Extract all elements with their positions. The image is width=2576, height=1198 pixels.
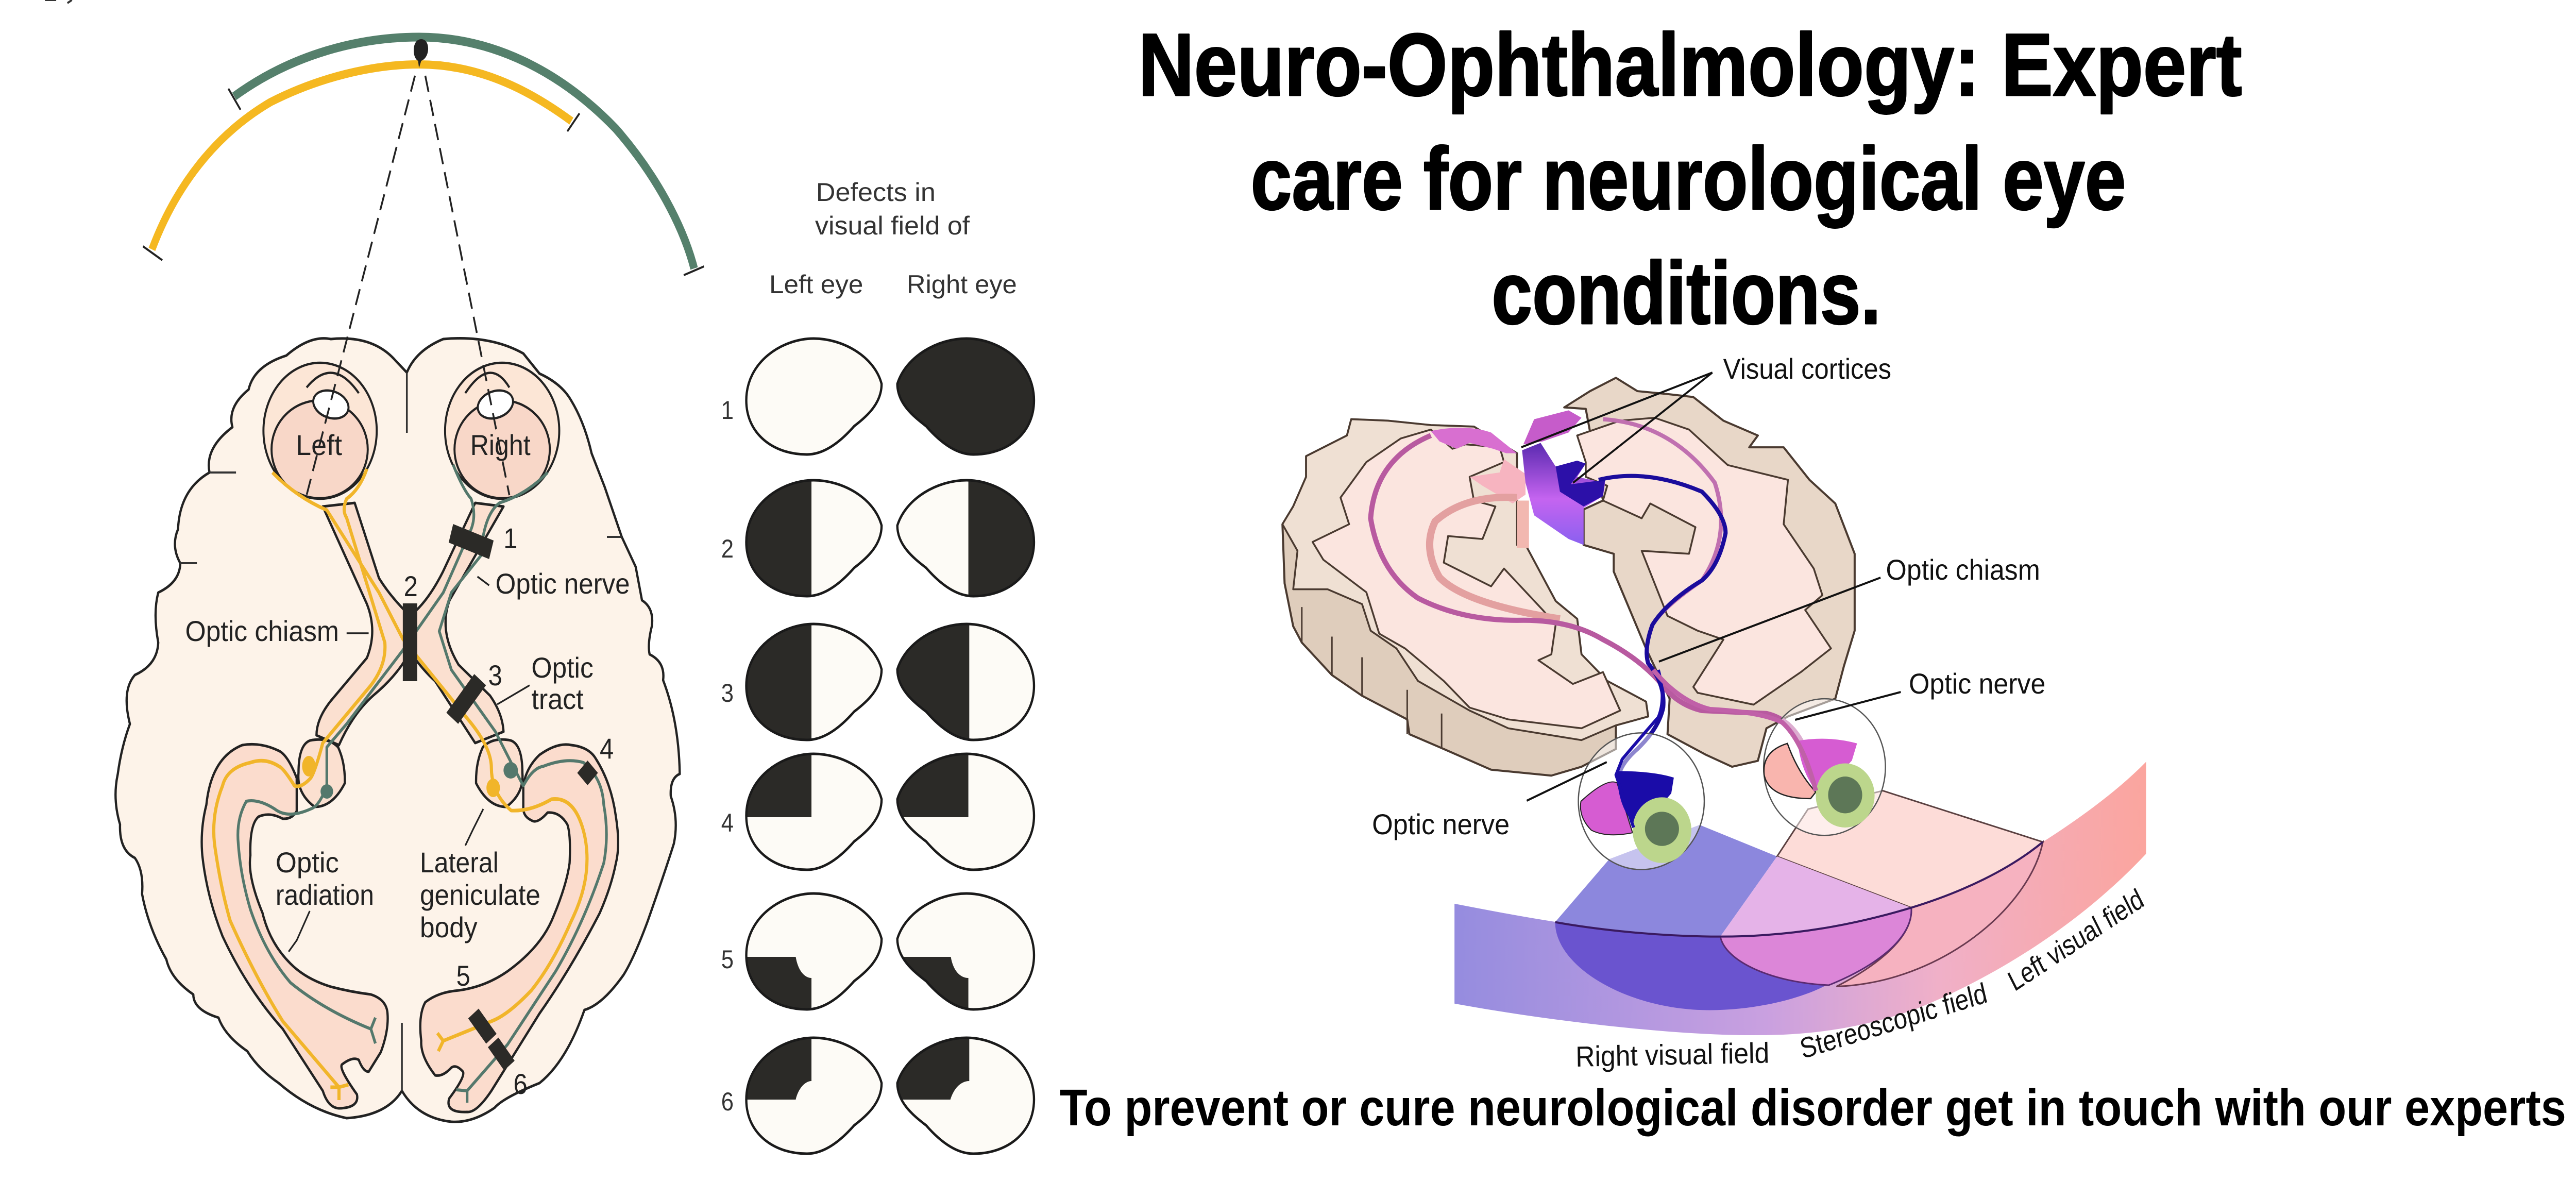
- anatomical labels: 4: [600, 733, 614, 765]
- green nerve tracts: [238, 465, 606, 1103]
- callout: optic nerve right: Optic nerve: [1909, 668, 2045, 700]
- anatomical labels: radiation: [276, 879, 374, 912]
- defects heading: Defects in: [816, 178, 936, 207]
- defects heading: visual field of: [815, 211, 970, 240]
- neural tracks: [1430, 497, 1560, 619]
- row numbers: 4: [721, 808, 734, 837]
- anatomical labels: [185, 429, 630, 1101]
- eye globe right: [1764, 699, 1886, 835]
- anatomical labels: Lateral: [420, 847, 499, 879]
- callout: visual cortices: [1521, 353, 1891, 483]
- row numbers: 6: [721, 1087, 734, 1116]
- title: Neuro-Ophthalmology: Expert: [1138, 15, 2242, 114]
- defects heading: Right eye: [907, 270, 1017, 299]
- field labels: Left visual field: [2003, 883, 2148, 998]
- lesion bars: [403, 524, 598, 1066]
- left eye: [263, 363, 377, 499]
- anatomical labels: 5: [456, 960, 470, 992]
- anatomical labels: Optic: [276, 847, 339, 879]
- row numbers: 2: [721, 534, 734, 563]
- visual field band and cones: [1454, 762, 2146, 1035]
- anatomical labels: 6: [514, 1068, 528, 1101]
- central fissure: [180, 373, 622, 1091]
- callout: optic nerve left: [1372, 762, 1607, 841]
- right visual cortex: [1523, 410, 1582, 444]
- anatomical labels: geniculate: [420, 879, 540, 912]
- visual field arcs: [143, 37, 704, 275]
- row numbers: [721, 396, 734, 1116]
- row 3 fields: [747, 624, 1034, 740]
- call to action text: To prevent or cure neurological disorder get in touch with our experts: [1060, 1078, 2566, 1136]
- row 5 fields: [747, 893, 1034, 1009]
- panel: binocular visual pathway illustration: [1282, 353, 2148, 1073]
- anatomical labels: 1: [503, 522, 517, 555]
- field labels: Right visual field: [1575, 1037, 1770, 1073]
- anatomical labels: Right: [470, 429, 531, 462]
- anatomical labels: tract: [531, 683, 584, 716]
- row numbers: 5: [721, 945, 734, 974]
- callout: visual cortices: Visual cortices: [1723, 353, 1891, 385]
- optic nerves to eyes: [1616, 670, 1662, 828]
- anatomical labels: Optic nerve: [496, 568, 630, 600]
- lateral geniculate bodies: [298, 739, 522, 807]
- left hemisphere: [1282, 419, 1648, 775]
- right eye: [445, 363, 560, 499]
- right hemisphere: [1564, 378, 1855, 767]
- panel: visual field defects: [721, 178, 1034, 1154]
- eyes: [1579, 670, 1886, 870]
- field labels: Stereoscopic field: [1797, 977, 1990, 1065]
- row 4 fields: [747, 754, 1034, 870]
- callout: optic nerve right: [1795, 668, 2045, 720]
- defects heading: [769, 178, 1017, 299]
- anatomical labels: Left: [296, 429, 342, 462]
- defects heading: Left eye: [769, 270, 863, 299]
- field labels: [1575, 883, 2148, 1073]
- title: [1138, 15, 2242, 343]
- anatomical labels: 2: [404, 570, 418, 603]
- callout: optic chiasm: [1659, 554, 2040, 662]
- LGN cell bodies: [302, 756, 518, 799]
- brain slab: [1282, 378, 1855, 779]
- row 6 fields: [747, 1038, 1034, 1154]
- callout: optic chiasm: Optic chiasm: [1886, 554, 2040, 586]
- eye globe left: [1579, 733, 1704, 870]
- brain outline: [115, 339, 680, 1122]
- title: conditions.: [1492, 244, 1881, 343]
- anatomical labels: Optic chiasm: [185, 615, 339, 648]
- yellow nerve tracts: [214, 469, 587, 1100]
- leader lines: [289, 577, 530, 952]
- dashed lines of sight: [307, 76, 510, 495]
- row numbers: 1: [721, 396, 734, 425]
- anatomical labels: 3: [488, 660, 502, 692]
- title: care for neurological eye: [1251, 129, 2126, 228]
- callout: optic nerve left: Optic nerve: [1372, 808, 1510, 841]
- anatomical labels: body: [420, 912, 478, 944]
- row 1 fields: [747, 339, 1034, 454]
- optic radiation left: [202, 744, 388, 1108]
- optic radiation right: [420, 745, 618, 1112]
- anatomical labels: Optic: [531, 652, 594, 684]
- row 2 fields: [747, 480, 1034, 596]
- left visual cortex: [1431, 428, 1517, 453]
- fixation point: [414, 39, 428, 68]
- optic nerves and chiasm: [316, 503, 503, 745]
- panel: visual pathway brain diagram: [115, 37, 704, 1122]
- row numbers: 3: [721, 679, 734, 707]
